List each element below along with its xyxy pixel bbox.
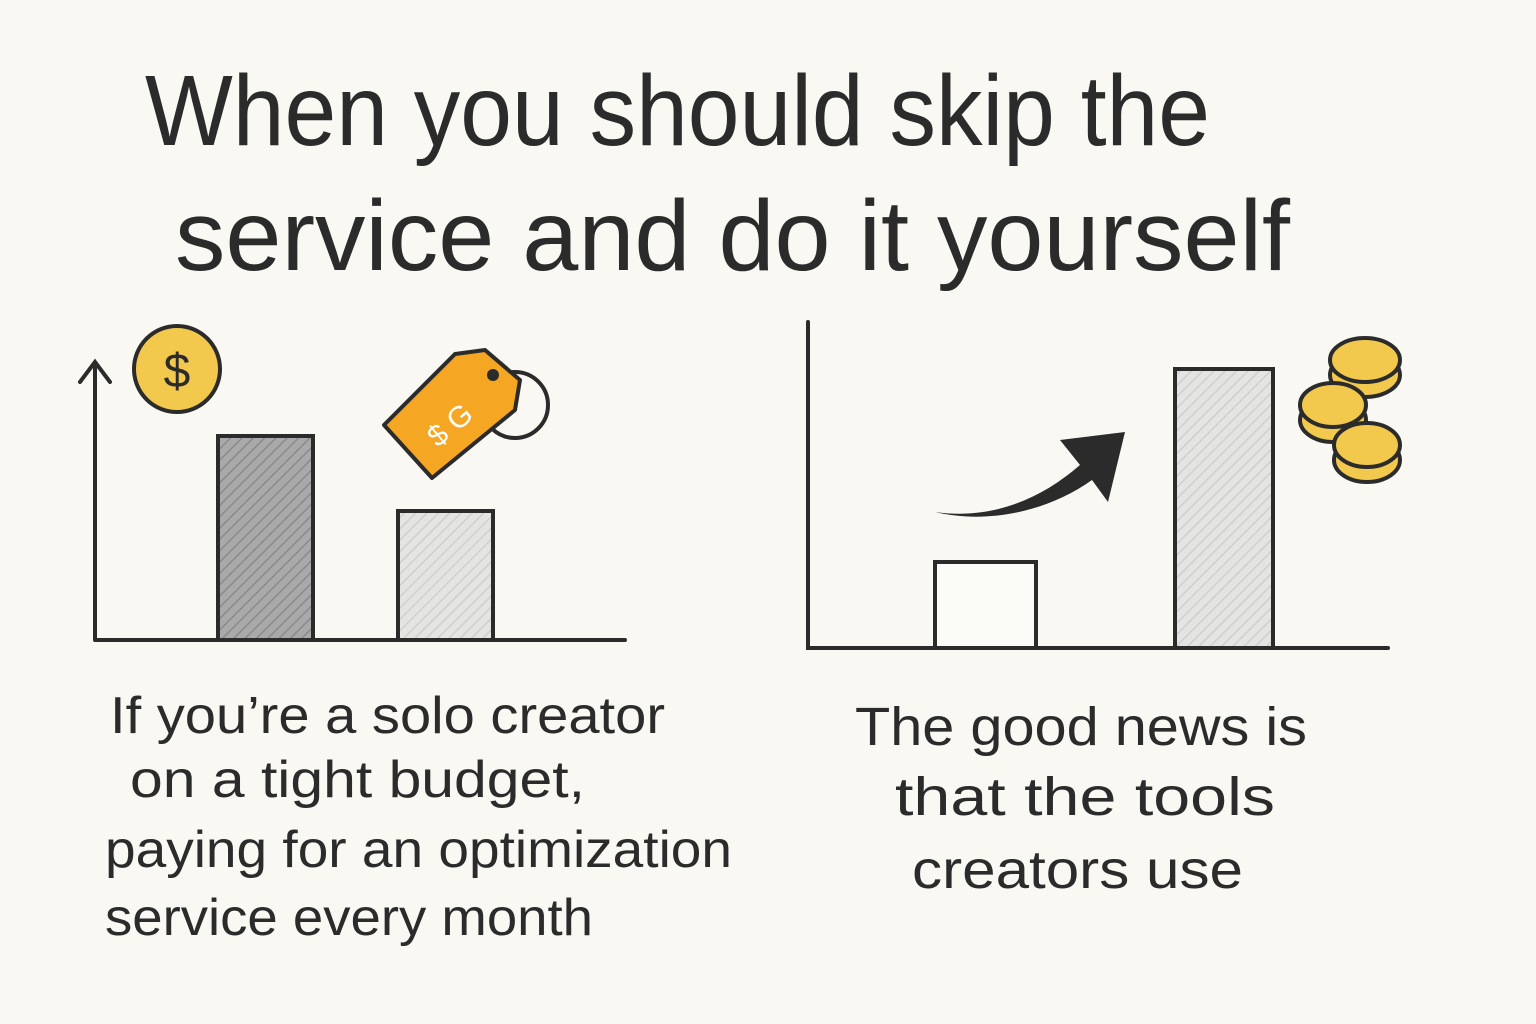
bar: tall [1175,369,1273,648]
text block: left caption: service every month [105,889,593,947]
panel: right chart [808,322,1400,648]
text block: right caption [855,697,1307,900]
text block: right caption: that the tools [895,767,1275,827]
text block: right caption: The good news is [855,697,1307,757]
arrow: growth [935,432,1125,517]
text block: left caption [105,687,732,947]
icon: price tag: $ G [421,397,479,454]
text block: left caption: If you’re a solo creator [110,687,665,745]
icon: dollar coin: $ [164,345,190,398]
text block: left caption: on a tight budget, [130,751,585,809]
bar: DIY cost [398,511,493,640]
panel: left chart [80,326,625,640]
chart axes right [808,322,1388,648]
bar: service cost [218,436,313,640]
chart axes left [80,362,625,640]
text block: right caption: creators use [912,840,1243,900]
title: When you should skip the [145,55,1210,167]
title [145,55,1290,292]
icon: dollar coin [134,326,220,412]
bar: small [935,562,1036,648]
text block: left caption: paying for an optimization [105,821,732,879]
title: service and do it yourself [175,180,1290,292]
icon: price tag [384,350,548,478]
icon: coins stack [1300,338,1400,482]
